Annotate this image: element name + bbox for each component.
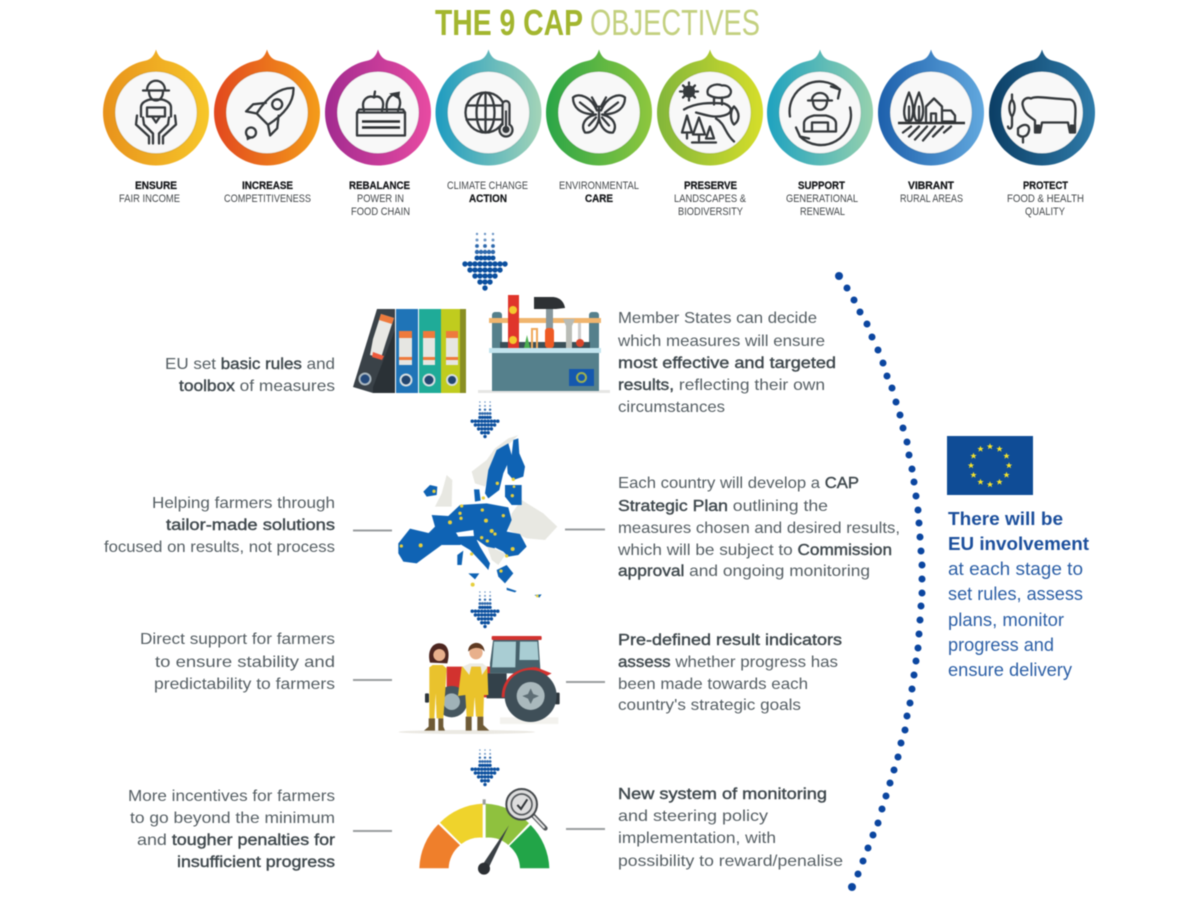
- icon: toolbox: [478, 295, 610, 393]
- icon: rocket: [214, 50, 320, 166]
- arrow: dotted arrow to farmers: [470, 591, 500, 628]
- icon: performance gauge: [419, 789, 549, 875]
- tractor: [436, 636, 560, 722]
- text: CAP strategic plan: [617, 475, 900, 580]
- icon: EU flag: [947, 436, 1033, 495]
- text: member states decide: [617, 310, 836, 416]
- text: EU involvement: [948, 509, 1089, 680]
- man farmer: [458, 643, 489, 731]
- text: member states decide: Member States can decide: [618, 310, 817, 327]
- text: result indicators: [618, 632, 842, 714]
- text: monitoring system: implementation, with: [618, 830, 776, 847]
- objective 7: support generational renewal: RENEWAL: [800, 206, 845, 218]
- objective 3: rebalance power in food chain: [325, 50, 431, 218]
- objective 2: increase competitiveness: INCREASE: [242, 180, 293, 192]
- icon: farmer in caring hands: [103, 50, 209, 166]
- woman farmer: [424, 643, 449, 731]
- objective 9: protect food and health quality: QUALITY: [1025, 206, 1066, 218]
- text: result indicators: Pre-defined result indicators: [618, 632, 842, 649]
- objective 6: preserve landscapes and biodiversity: LANDSCAPES &: [674, 193, 747, 205]
- objective 8: vibrant rural areas: RURAL AREAS: [900, 193, 963, 205]
- text: result indicators: country's strategic goals: [618, 697, 801, 714]
- objective 4: climate change action: CLIMATE CHANGE: [447, 180, 528, 192]
- objective 1: ensure fair income: ENSURE: [135, 180, 177, 192]
- objective 9: protect food and health quality: [989, 50, 1095, 218]
- text: member states decide: which measures will ensure: [617, 333, 825, 350]
- text: tailor-made solutions: tailor-made solutions: [166, 517, 335, 534]
- icon: farmer with renewal arrows: [767, 50, 873, 166]
- text: monitoring system: possibility to reward/penalise: [618, 853, 843, 870]
- arrow: main dotted arrow: [462, 233, 508, 291]
- text: CAP strategic plan: Strategic Plan outlining the: [618, 498, 828, 515]
- text: direct support: Direct support for farmers: [140, 631, 335, 648]
- text: result indicators: been made towards each: [618, 676, 808, 693]
- dotted arc: [835, 272, 926, 891]
- objective 3: rebalance power in food chain: REBALANCE: [349, 180, 410, 192]
- title: [435, 2, 760, 43]
- icon: farmers and tractor: [398, 636, 560, 734]
- text: CAP strategic plan: approval and ongoing monitoring: [618, 563, 870, 580]
- objective 3: rebalance power in food chain: POWER IN: [357, 193, 404, 205]
- objective 5: environmental care: [546, 50, 652, 205]
- objective 7: support generational renewal: [767, 50, 873, 218]
- text: member states decide: circumstances: [618, 399, 725, 416]
- objective 7: support generational renewal: GENERATIONAL: [786, 193, 858, 205]
- text: EU involvement: ensure delivery: [948, 660, 1072, 680]
- icon: fruit crate: [325, 50, 431, 166]
- icon: binders: [353, 309, 466, 393]
- objective 4: climate change action: ACTION: [469, 193, 507, 205]
- icon: livestock and produce: [989, 50, 1095, 166]
- text: direct support: predictability to farmers: [154, 676, 335, 693]
- objective 2: increase competitiveness: COMPETITIVENESS: [224, 193, 311, 205]
- text: EU involvement: plans, monitor: [948, 610, 1064, 630]
- text: result indicators: assess whether progress has: [618, 654, 838, 671]
- connector lines: [353, 530, 605, 831]
- text: direct support: [140, 631, 335, 693]
- icon: EU plate on toolbox: [569, 369, 594, 386]
- text: EU involvement: EU involvement: [948, 534, 1089, 554]
- text: monitoring system: and steering policy: [618, 808, 768, 825]
- map: EU member states: [398, 438, 542, 598]
- map: non-member countries: [435, 435, 557, 565]
- icon: magnifier with check: [506, 789, 545, 828]
- objective 5: environmental care: CARE: [585, 193, 613, 205]
- text: member states decide: most effective and targeted: [618, 355, 836, 372]
- icon: butterfly: [546, 50, 652, 166]
- title: OBJECTIVES: [590, 2, 760, 43]
- text: EU rules: EU set basic rules and: [165, 356, 335, 373]
- objective 8: vibrant rural areas: [878, 50, 984, 205]
- objective 8: vibrant rural areas: VIBRANT: [908, 180, 954, 192]
- objective 1: ensure fair income: [103, 50, 209, 205]
- text: EU involvement: There will be: [948, 509, 1063, 529]
- text: member states decide: results, reflecting their own: [618, 377, 825, 394]
- title: THE 9 CAP: [435, 2, 583, 43]
- text: EU rules: [165, 356, 335, 395]
- text: EU involvement: progress and: [948, 635, 1054, 655]
- arrow: dotted arrow to gauge: [470, 749, 500, 786]
- objective 3: rebalance power in food chain: FOOD CHAIN: [351, 206, 410, 218]
- text: CAP strategic plan: measures chosen and desired results,: [618, 520, 900, 537]
- text: EU rules: toolbox of measures: [179, 378, 335, 395]
- text: incentives and penalties: [128, 788, 336, 871]
- text: incentives and penalties: to go beyond the minimum: [130, 810, 335, 827]
- objective 9: protect food and health quality: FOOD & HEALTH: [1007, 193, 1084, 205]
- text: monitoring system: [618, 786, 843, 870]
- objective 7: support generational renewal: SUPPORT: [798, 180, 845, 192]
- text: CAP strategic plan: which will be subject to Commission: [617, 542, 892, 559]
- icon: landscape: [657, 50, 763, 166]
- map: capital stars: [400, 478, 539, 597]
- text: incentives and penalties: insufficient progress: [177, 854, 335, 871]
- text: EU involvement: at each stage to: [948, 559, 1083, 579]
- objective 5: environmental care: ENVIRONMENTAL: [559, 180, 639, 192]
- objective 4: climate change action: [436, 50, 542, 205]
- text: EU involvement: set rules, assess: [948, 584, 1083, 604]
- objective 6: preserve landscapes and biodiversity: BIODIVERSITY: [678, 206, 744, 218]
- text: monitoring system: New system of monitoring: [618, 786, 827, 803]
- icon: globe and thermometer: [436, 50, 542, 166]
- objective 2: increase competitiveness: [214, 50, 320, 205]
- arrow: dotted arrow to map: [470, 401, 500, 438]
- text: incentives and penalties: and tougher penalties for: [137, 832, 336, 849]
- text: direct support: to ensure stability and: [155, 654, 335, 671]
- objective 1: ensure fair income: FAIR INCOME: [119, 193, 180, 205]
- objective 9: protect food and health quality: PROTECT: [1023, 180, 1068, 192]
- text: tailor-made solutions: focused on results, not process: [104, 539, 335, 556]
- text: CAP strategic plan: Each country will develop a CAP: [618, 475, 859, 492]
- text: tailor-made solutions: [104, 495, 335, 556]
- objective 6: preserve landscapes and biodiversity: [657, 50, 763, 218]
- icon: farmhouse and fields: [878, 50, 984, 166]
- text: incentives and penalties: More incentives for farmers: [128, 788, 335, 805]
- text: tailor-made solutions: Helping farmers through: [152, 495, 335, 512]
- icon: EU map: [398, 435, 557, 598]
- objective 6: preserve landscapes and biodiversity: PRESERVE: [684, 180, 737, 192]
